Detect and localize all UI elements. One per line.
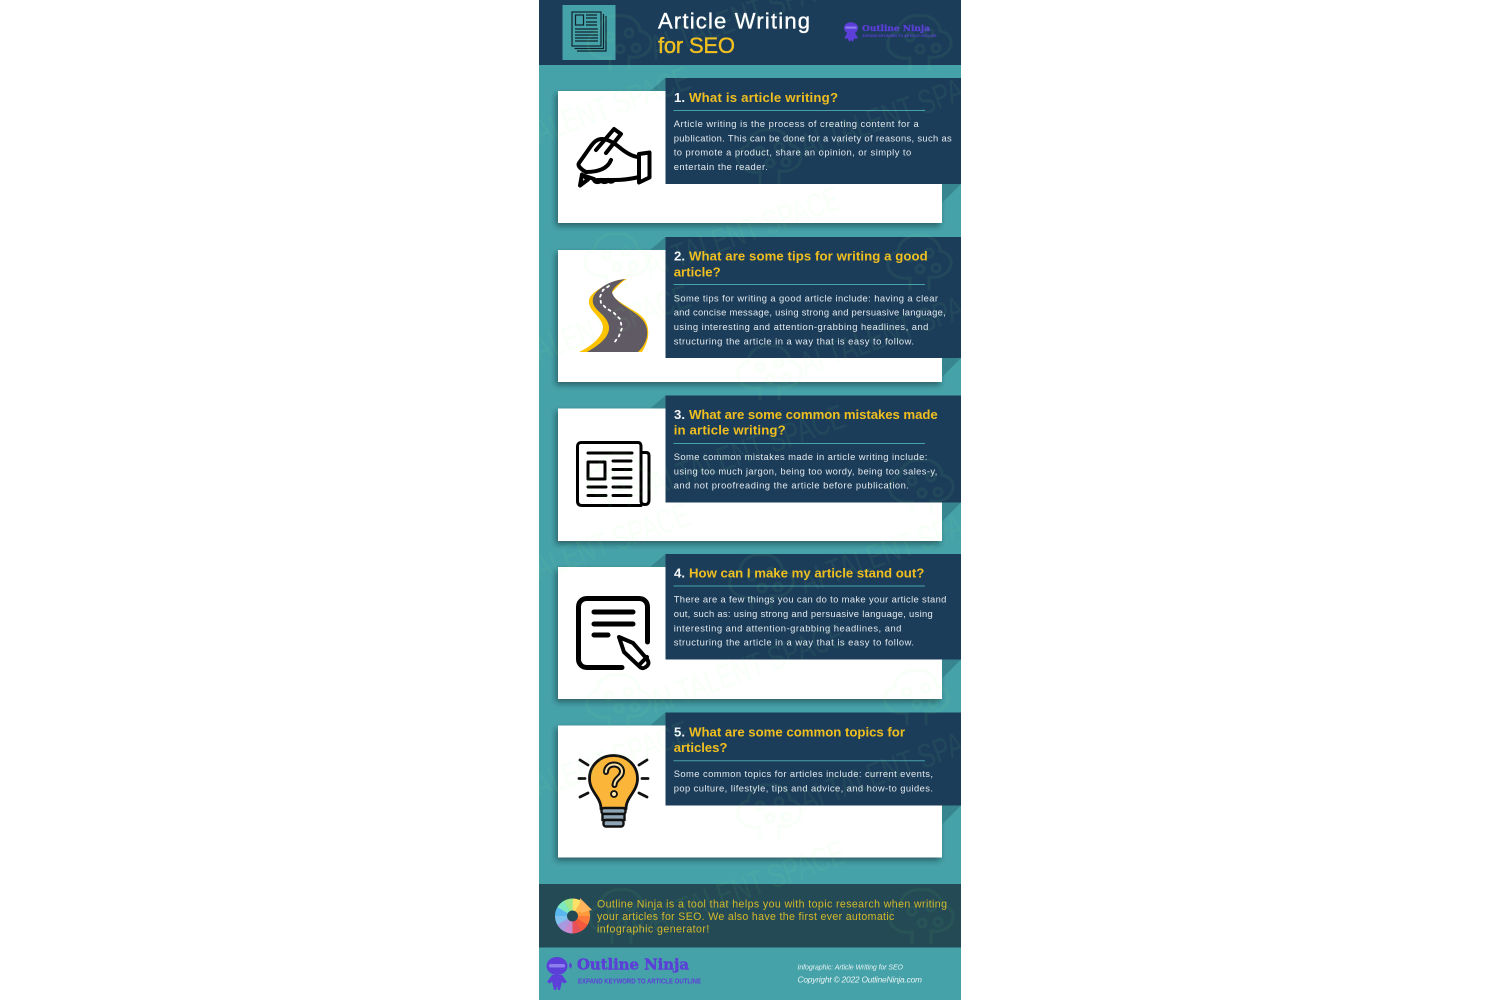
heading 4: 4.: [674, 566, 685, 581]
watermark overlay: AI TALENT SPACE: [645, 834, 850, 940]
icon: newspaper: [578, 442, 649, 506]
text: answer 2: Some tips for writing a good article include: having a clear: [674, 292, 938, 303]
text: callout: Outline Ninja is a tool that helps you with topic research when writing: [597, 898, 947, 910]
watermark overlay: AI TALENT SPACE: [490, 60, 695, 166]
header band: [539, 0, 961, 65]
text: answer 4: [674, 594, 946, 648]
watermark overlay: [578, 0, 961, 944]
footer credits: Copyright © 2022 OutlineNinja.com: [798, 975, 922, 985]
text: callout: [597, 898, 947, 936]
text: answer 2: structuring the article in a way that is easy to follow.: [674, 335, 914, 346]
icon: colour wheel: [557, 898, 592, 932]
infographic background: [539, 0, 961, 1000]
panel: question 4: [558, 554, 961, 699]
heading 1: 1.: [674, 90, 685, 105]
watermark overlay: AI TALENT SPACE: [795, 496, 1000, 602]
watermark overlay: AI TALENT SPACE: [640, 180, 845, 286]
icon: document stack: [562, 5, 616, 60]
watermark overlay: AI TALENT SPACE: [795, 714, 1000, 820]
text: answer 4: There are a few things you can do to make your article stand: [674, 594, 946, 605]
title: for SEO: [658, 33, 735, 58]
panel: question 1: [558, 78, 961, 223]
callout band: [539, 884, 961, 948]
text: callout: infographic generator!: [597, 924, 709, 936]
icon: hand writing: [579, 129, 650, 186]
heading 5: 5.: [674, 724, 685, 739]
text: answer 2: and concise message, using strong and persuasive language,: [674, 307, 946, 318]
heading 1: What is article writing?: [689, 90, 838, 105]
watermark overlay: AI TALENT SPACE: [795, 278, 1000, 384]
watermark overlay: AI TALENT SPACE: [645, 398, 850, 504]
text: answer 1: to promote a product, share an opinion, or simply to: [674, 147, 911, 158]
footer logo: Outline Ninja: Outline Ninja: [577, 956, 689, 974]
title: Article Writing: [658, 8, 810, 34]
text: answer 4: structuring the article in a way that is easy to follow.: [674, 637, 914, 648]
footer credits: [798, 964, 922, 985]
text: answer 5: pop culture, lifestyle, tips and advice, and how-to guides.: [674, 782, 933, 793]
text: answer 2: [674, 292, 946, 346]
heading 2: What are some tips for writing a good: [689, 249, 928, 264]
header logo: Outline Ninja: Outline Ninja: [862, 24, 931, 34]
text: answer 3: Some common mistakes made in article writing include:: [674, 451, 927, 462]
text: answer 3: [674, 451, 937, 491]
watermark overlay: AI TALENT SPACE: [795, 60, 1000, 166]
text: answer 1: Article writing is the process of creating content for a: [674, 118, 919, 129]
text: answer 5: Some common topics for articles include: current events,: [674, 768, 933, 779]
panel: question 5: [558, 712, 961, 858]
heading 3: [674, 407, 938, 438]
heading 2: [674, 249, 928, 279]
footer logo: Outline Ninja: [546, 956, 701, 990]
header logo: Outline Ninja: [844, 22, 937, 42]
footer credits: Infographic: Article Writing for SEO: [798, 964, 904, 972]
heading 5: What are some common topics for: [689, 724, 905, 739]
footer logo: Outline Ninja: EXPAND KEYWORD TO ARTICLE OUTLINE: [578, 978, 701, 986]
heading 3: 3.: [674, 407, 685, 422]
watermark overlay: AI TALENT SPACE: [645, 616, 850, 722]
watermark overlay: AI TALENT SPACE: [490, 714, 695, 820]
text: answer 1: [674, 118, 952, 172]
text: answer 4: interesting and attention-grabbing headlines, and: [674, 622, 901, 633]
text: answer 1: publication. This can be done for a variety of reasons, such as: [674, 132, 952, 143]
text: answer 3: using too much jargon, being too wordy, being too sales-y,: [674, 465, 937, 476]
heading 5: articles?: [674, 740, 727, 755]
watermark overlay: AI TALENT SPACE: [490, 496, 695, 602]
panel: question 3: [558, 396, 961, 541]
icon: note with pencil: [578, 598, 648, 668]
text: answer 3: and not proofreading the article before publication.: [674, 480, 909, 491]
text: answer 1: entertain the reader.: [674, 161, 768, 172]
heading 2: 2.: [674, 249, 685, 264]
icon: winding road: [579, 279, 648, 352]
text: answer 5: [674, 768, 933, 793]
watermark overlay: AI TALENT SPACE: [490, 278, 695, 384]
text: answer 2: using interesting and attention-grabbing headlines, and: [674, 321, 928, 332]
heading 2: article?: [674, 264, 721, 279]
heading 3: What are some common mistakes made: [689, 407, 938, 422]
heading 3: in article writing?: [674, 423, 786, 438]
heading 4: How can I make my article stand out?: [689, 566, 924, 581]
text: answer 4: out, such as: using strong and persuasive language, using: [674, 608, 933, 619]
panel: question 2: [558, 237, 961, 382]
header logo: Outline Ninja: EXPAND KEYWORD TO ARTICLE OUTLINE: [862, 33, 937, 38]
heading 5: [674, 724, 905, 755]
text: callout: your articles for SEO. We also have the first ever automatic: [597, 911, 895, 923]
icon: question light bulb: [579, 756, 648, 826]
title: [658, 8, 810, 58]
